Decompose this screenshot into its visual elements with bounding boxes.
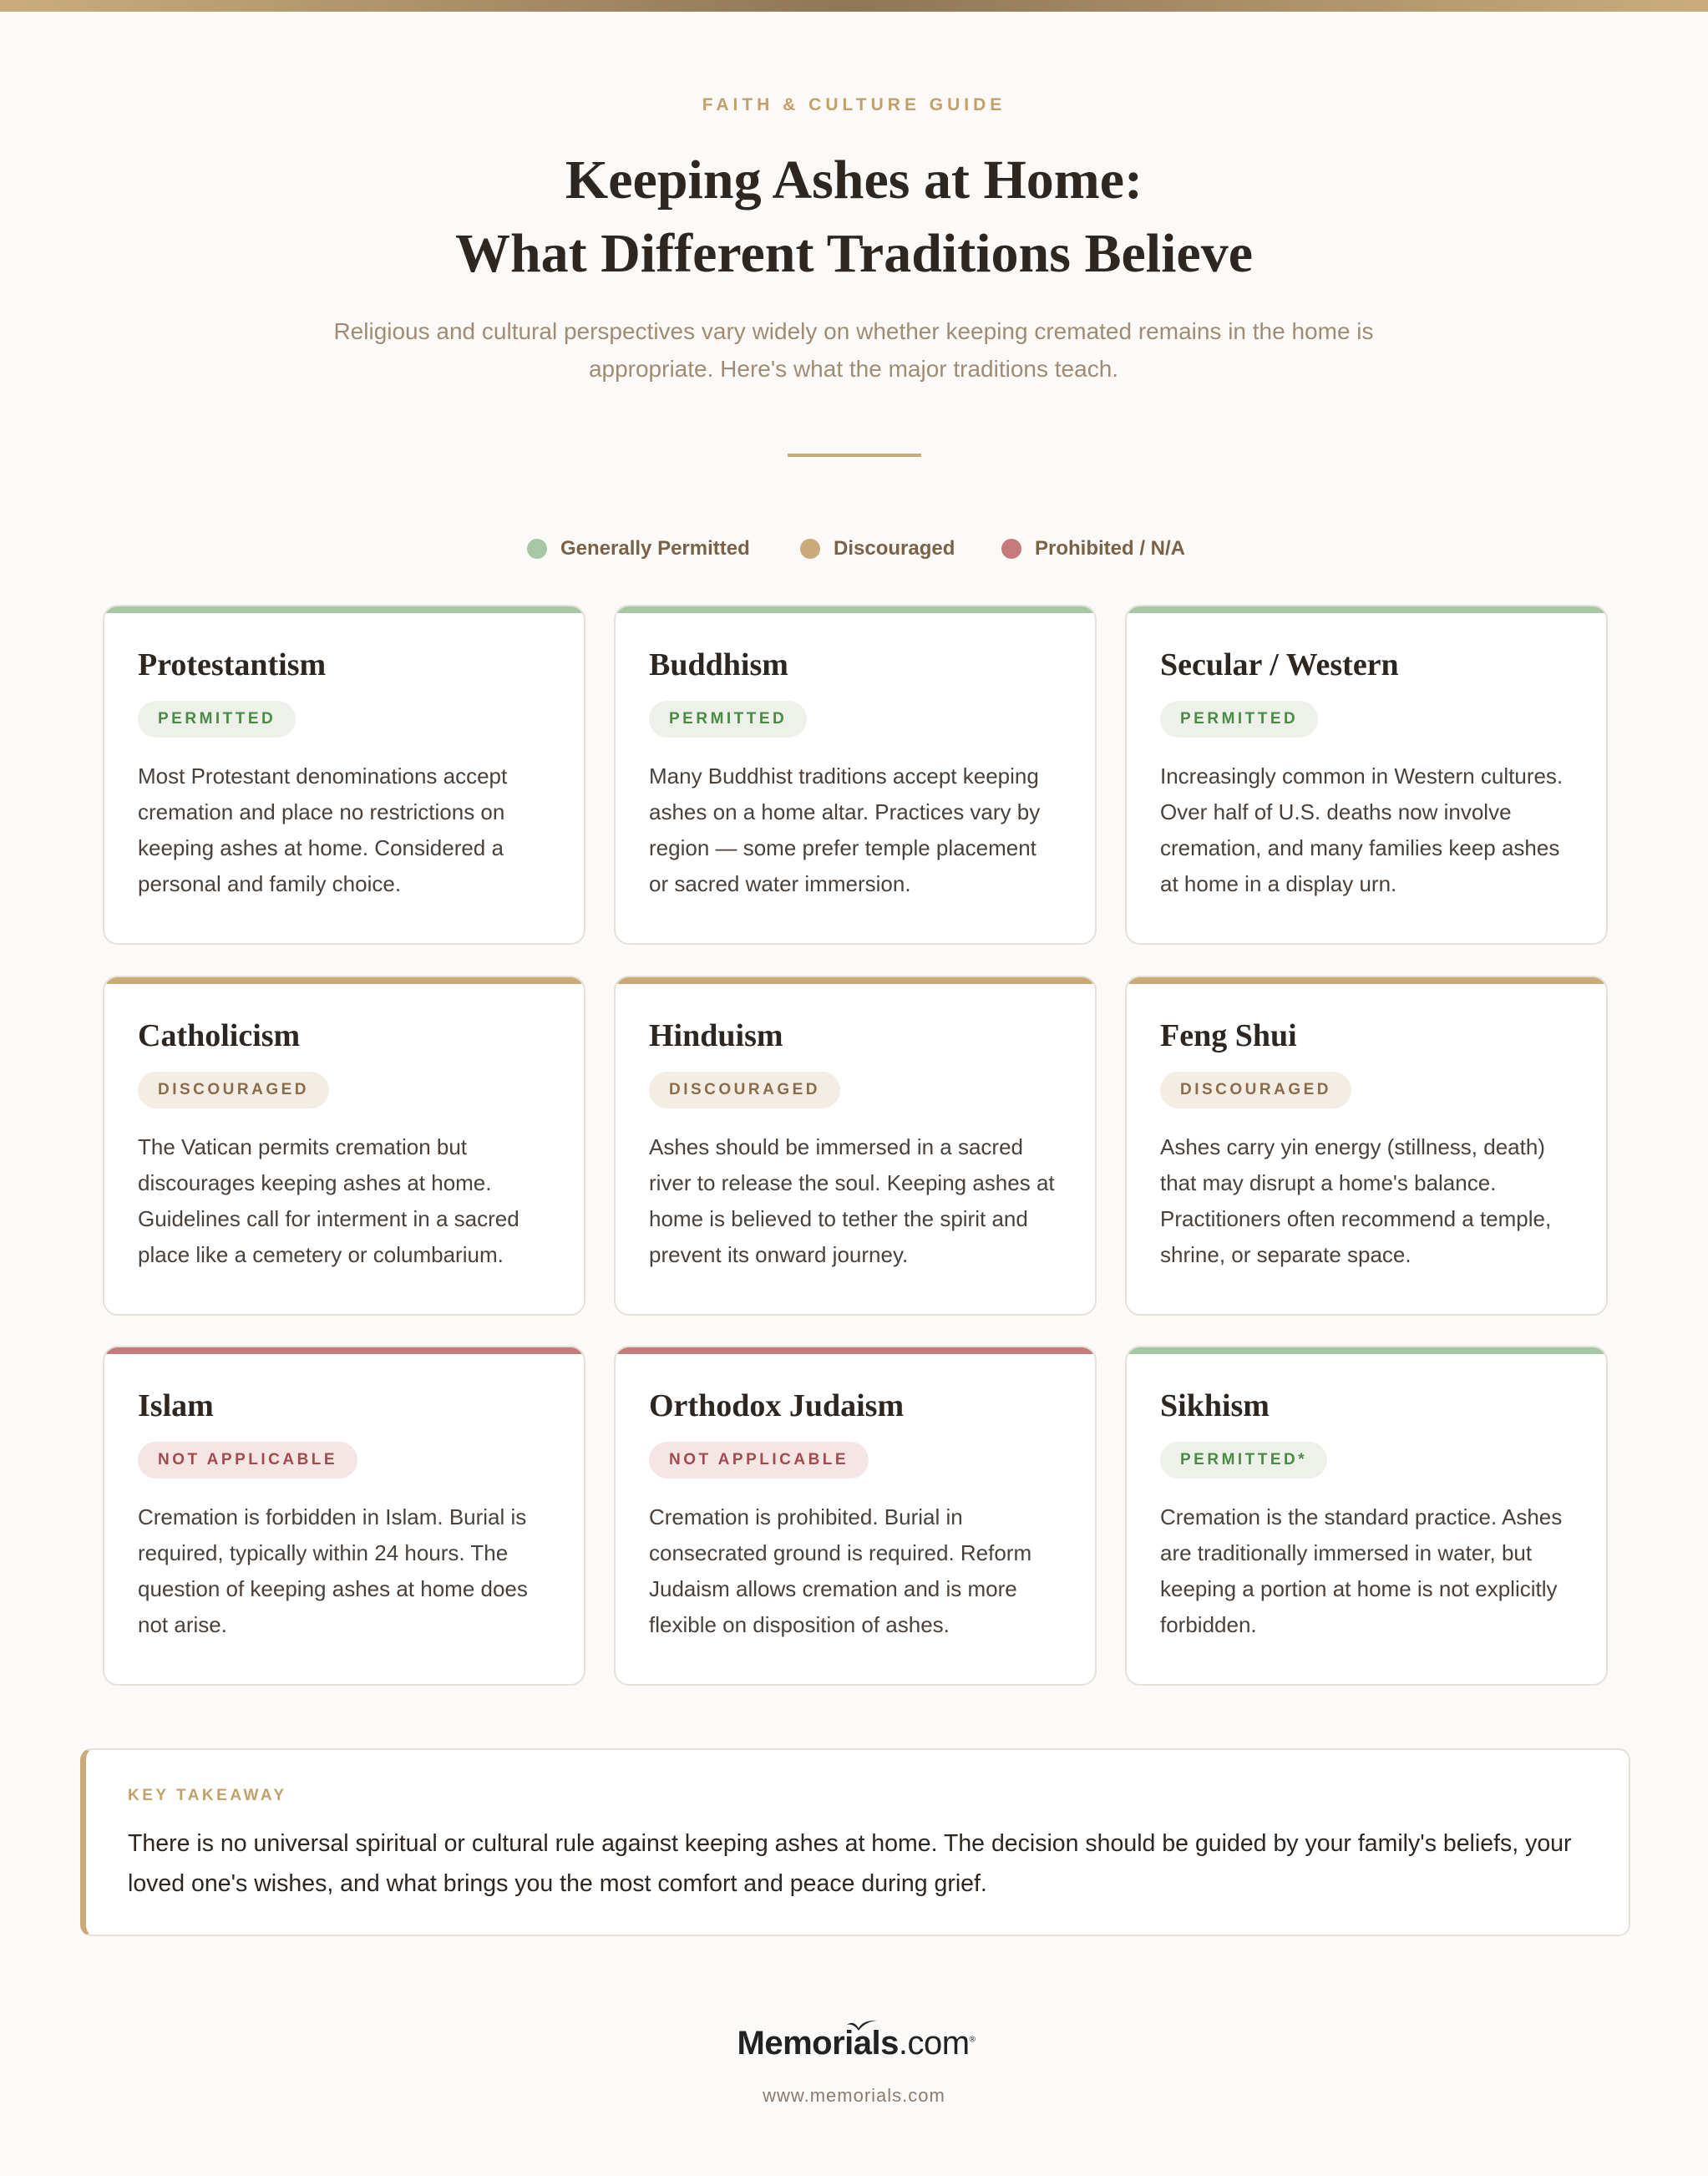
panel: Protestantism: PERMITTED bbox=[158, 710, 276, 728]
panel: Buddhism bbox=[614, 605, 1097, 945]
panel: Catholicism: DISCOURAGED bbox=[158, 1081, 309, 1098]
panel: Secular: Increasingly common in Western cultures. Over half of U.S. deaths now involve cremation, and many families keep ashes at home in a display urn. bbox=[1160, 763, 1563, 896]
panel: Sikhism: PERMITTED* bbox=[1180, 1451, 1307, 1468]
legend: Generally Permitted bbox=[560, 537, 750, 560]
panel: Buddhism: Buddhism bbox=[649, 647, 788, 682]
panel: Islam: Islam bbox=[138, 1388, 214, 1423]
url: www.memorials.com bbox=[763, 2085, 945, 2106]
panel: Protestantism: Most Protestant denominations accept cremation and place no restrictions on keeping ashes at home. Considered a personal and family choice. bbox=[138, 763, 507, 896]
panel: Feng Shui bbox=[1125, 976, 1608, 1316]
panel: Feng Shui: Ashes carry yin energy (stillness, death) that may disrupt a home's balance. Practitioners often recommend a temple, shrine, or separate space. bbox=[1160, 1134, 1551, 1267]
title: What Different Traditions Believe bbox=[455, 223, 1253, 284]
legend: Discouraged bbox=[834, 537, 955, 560]
panel: Orthodox Judaism: Orthodox Judaism bbox=[649, 1388, 904, 1423]
panel: Orthodox Judaism bbox=[614, 1346, 1097, 1686]
panel: Secular: Secular / Western bbox=[1160, 647, 1399, 682]
panel: Protestantism: Protestantism bbox=[138, 647, 326, 682]
panel: Orthodox Judaism: Cremation is prohibited. Burial in consecrated ground is required. Reform Judaism allows cremation and is more flexible on disposition of ashes. bbox=[649, 1504, 1031, 1637]
panel: Hinduism bbox=[614, 976, 1097, 1316]
panel: Catholicism bbox=[103, 976, 585, 1316]
panel: Hinduism: Hinduism bbox=[649, 1018, 783, 1053]
callout: key takeaway: There is no universal spiritual or cultural rule against keeping ashes at home. The decision should be guided by your family's beliefs, your loved one's wishes, and what brings you the most comfort and peace during grief. bbox=[128, 1830, 1572, 1897]
panel: Islam: Cremation is forbidden in Islam. Burial is required, typically within 24 hours. The question of keeping ashes at home does not arise. bbox=[138, 1504, 528, 1637]
panel: Sikhism: Sikhism bbox=[1160, 1388, 1270, 1423]
panel: Feng Shui: DISCOURAGED bbox=[1180, 1081, 1331, 1098]
panel: Sikhism bbox=[1125, 1346, 1608, 1686]
panel: Orthodox Judaism: NOT APPLICABLE bbox=[669, 1451, 849, 1468]
panel: Protestantism bbox=[103, 605, 585, 945]
panel: Buddhism: Many Buddhist traditions accept keeping ashes on a home altar. Practices vary by region — some prefer temple placement or sacred water immersion. bbox=[649, 763, 1040, 896]
logo: Memorials.com® bbox=[737, 2025, 975, 2062]
panel: Islam: NOT APPLICABLE bbox=[158, 1451, 337, 1468]
panel: Sikhism: Cremation is the standard practice. Ashes are traditionally immersed in water, but keeping a portion at home is not explicitly forbidden. bbox=[1160, 1504, 1562, 1637]
callout: key takeaway bbox=[80, 1748, 1630, 1936]
title bbox=[455, 150, 1253, 284]
eyebrow: FAITH & CULTURE GUIDE bbox=[702, 95, 1006, 114]
legend: Prohibited / N/A bbox=[1035, 537, 1185, 560]
subtitle: Religious and cultural perspectives vary widely on whether keeping cremated remains in the home is appropriate. Here's what the major traditions teach. bbox=[333, 318, 1374, 382]
panel: Secular bbox=[1125, 605, 1608, 945]
title: Keeping Ashes at Home: bbox=[565, 150, 1143, 210]
panel: Buddhism: PERMITTED bbox=[669, 710, 787, 728]
panel: Catholicism: The Vatican permits cremation but discourages keeping ashes at home. Guidelines call for interment in a sacred place like a cemetery or columbarium. bbox=[138, 1134, 519, 1267]
callout: key takeaway: KEY TAKEAWAY bbox=[128, 1787, 287, 1804]
panel: Feng Shui: Feng Shui bbox=[1160, 1018, 1297, 1053]
panel: Catholicism: Catholicism bbox=[138, 1018, 300, 1053]
panel: Secular: PERMITTED bbox=[1180, 710, 1298, 728]
legend bbox=[527, 537, 1185, 560]
panel: Hinduism: DISCOURAGED bbox=[669, 1081, 820, 1098]
panel: Islam bbox=[103, 1346, 585, 1686]
top bar bbox=[0, 0, 1708, 12]
panel: Hinduism: Ashes should be immersed in a sacred river to release the soul. Keeping ashes at home is believed to tether the spirit and prevent its onward journey. bbox=[649, 1134, 1055, 1267]
